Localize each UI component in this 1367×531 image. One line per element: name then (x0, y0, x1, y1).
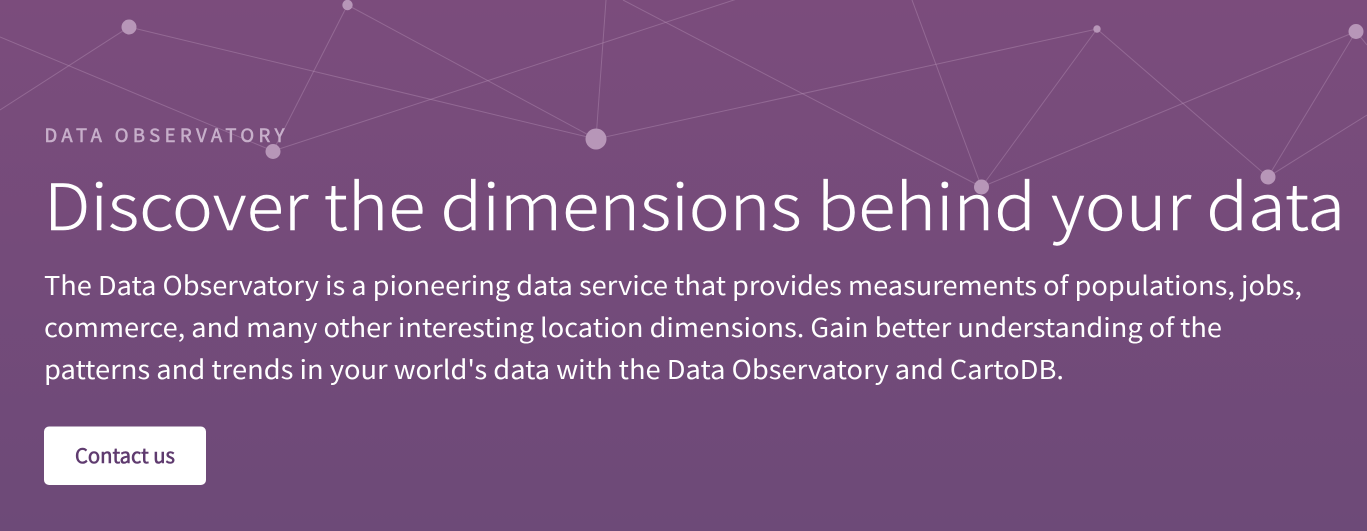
contact button (44, 426, 206, 485)
description paragraph: commerce, and many other interesting location dimensions. Gain better understanding of the (44, 308, 1222, 345)
description paragraph (44, 266, 1302, 387)
main heading: Discover the dimensions behind your data (44, 157, 1345, 249)
eyebrow label: DATA OBSERVATORY (44, 122, 285, 148)
description paragraph: patterns and trends in your world's data with the Data Observatory and CartoDB. (44, 350, 1064, 387)
network graphic: lines and nodes (0, 0, 1367, 194)
contact button: Contact us (75, 440, 175, 469)
description paragraph: The Data Observatory is a pioneering data service that provides measurements of populations, jobs, (44, 266, 1302, 303)
